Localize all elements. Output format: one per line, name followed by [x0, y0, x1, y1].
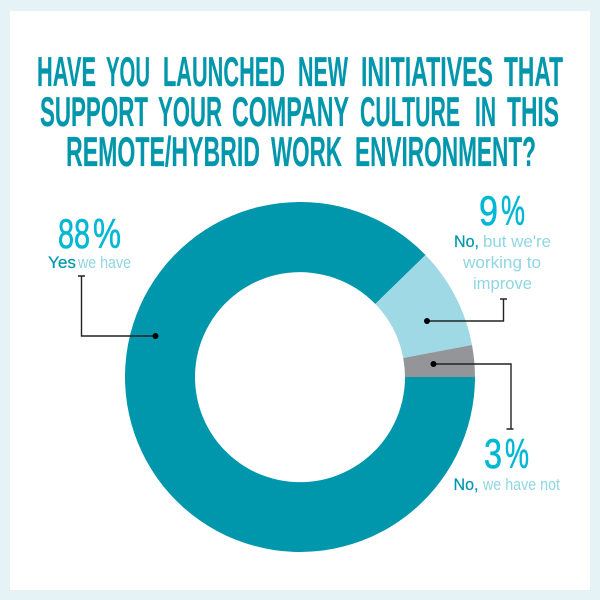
title: REMOTE/HYBRID [66, 128, 260, 175]
title: THIS [507, 88, 559, 135]
title: IN [475, 88, 496, 135]
title [37, 48, 563, 175]
slice: 9% working to improve [375, 255, 472, 358]
slice: 88% yes [125, 202, 475, 552]
label: 9%: improve [473, 274, 532, 293]
label: 9%: % [501, 187, 525, 234]
label: 3%: we have not [482, 475, 560, 494]
label: 3%: 3 [484, 430, 502, 477]
title: YOU [106, 48, 150, 95]
title: YOUR [158, 88, 222, 135]
label: 88%: we have [77, 253, 131, 272]
title: SUPPORT [40, 88, 148, 135]
label: 3%: No, [454, 475, 478, 494]
title: LAUNCHED [163, 48, 285, 95]
label: 88%: Yes [48, 253, 76, 272]
title: CULTURE [360, 88, 460, 135]
title: INITIATIVES [361, 48, 493, 95]
title: WORK [271, 128, 342, 175]
label: 9%: but we're [483, 232, 551, 251]
label: 3%: % [505, 430, 529, 477]
label: 88%: 88 [58, 210, 90, 257]
leader line: 88% [78, 276, 158, 339]
title: NEW [298, 48, 348, 95]
title: HAVE [37, 48, 96, 95]
label: 9%: No, [454, 232, 479, 251]
title: COMPANY [232, 88, 349, 135]
slice: 3% have not [403, 345, 475, 377]
donut chart [125, 202, 475, 552]
label: 88% [48, 210, 131, 272]
label: 3% [454, 430, 560, 494]
leader line: 3% [430, 361, 514, 429]
leader line: 9% [424, 299, 507, 324]
label: 9%: 9 [479, 187, 498, 234]
label: 9% [454, 187, 551, 293]
label: 9%: working to [462, 253, 541, 272]
label: 88%: % [93, 210, 121, 257]
